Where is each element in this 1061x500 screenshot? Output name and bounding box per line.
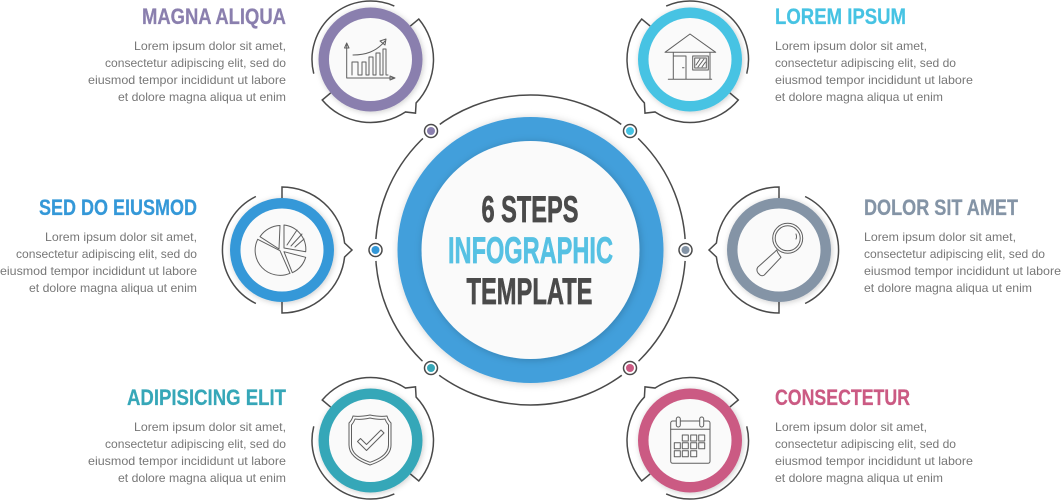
step circle: lorem ipsum [597,0,776,154]
inner disc [422,141,640,359]
text: dolor sit amet: et dolore magna aliqua ut enim [864,281,1032,295]
icon: magnifier [757,223,803,276]
text: adipisicing elit: eiusmod tempor incididunt ut labore [88,454,286,468]
node: purple [420,120,442,142]
center title: 6 STEPS [482,189,578,230]
step circle: dolor sit amet [709,187,839,313]
text: adipisicing elit: consectetur adipiscing elit, sed do [105,437,286,451]
text: consectetur: et dolore magna aliqua ut enim [775,471,943,485]
icon: house [665,34,716,79]
ring [727,198,831,302]
text: adipisicing elit: et dolore magna aliqua ut enim [118,471,286,485]
text: lorem ipsum: eiusmod tempor incididunt ut labore [775,73,973,87]
outline arcs [597,0,776,154]
text: sed do eiusmod: et dolore magna aliqua ut enim [29,281,197,295]
blue ring [398,117,664,383]
text: dolor sit amet: Lorem ipsum dolor sit amet, [864,230,1016,244]
outline arcs [222,187,352,313]
text: sed do eiusmod: SED DO EIUSMOD [39,195,197,220]
text: consectetur: Lorem ipsum dolor sit amet, [775,420,927,434]
text: consectetur: CONSECTETUR [775,385,910,410]
outer ring [376,95,686,405]
text: lorem ipsum [775,4,973,104]
text: consectetur [775,385,973,485]
center title: INFOGRAPHIC [448,230,613,271]
icon: pie chart [255,225,306,275]
center title [448,189,613,312]
icon: bar chart [344,39,395,80]
text: sed do eiusmod [0,195,197,295]
step circle: adipisicing elit [285,346,464,500]
ring [638,8,742,112]
text: magna aliqua: consectetur adipiscing elit, sed do [105,56,286,70]
text: consectetur: consectetur adipiscing elit, sed do [775,437,956,451]
text: lorem ipsum: Lorem ipsum dolor sit amet, [775,39,927,53]
text: sed do eiusmod: Lorem ipsum dolor sit amet, [45,230,197,244]
text: consectetur: eiusmod tempor incididunt ut labore [775,454,973,468]
text: magna aliqua: eiusmod tempor incididunt ut labore [88,73,286,87]
step circle: consectetur [597,346,776,500]
text: adipisicing elit: Lorem ipsum dolor sit amet, [134,420,286,434]
outline arcs [709,187,839,313]
text: dolor sit amet [864,195,1061,295]
node: light blue [619,120,641,142]
step circle: sed do eiusmod [222,187,352,313]
ring [638,388,742,492]
text: dolor sit amet: consectetur adipiscing elit, sed do [864,247,1045,261]
text: adipisicing elit [88,385,286,485]
text: sed do eiusmod: eiusmod tempor incididunt ut labore [0,264,197,278]
text: lorem ipsum: LOREM IPSUM [775,4,906,29]
node: blue [364,239,386,261]
outline arcs [285,346,464,500]
ring [230,198,334,302]
icon: shield [349,415,391,465]
outline arcs [285,0,464,154]
text: dolor sit amet: DOLOR SIT AMET [864,195,1018,220]
center title: TEMPLATE [466,271,592,312]
node: pink [619,357,641,379]
step circle: magna aliqua [285,0,464,154]
text: magna aliqua: et dolore magna aliqua ut enim [118,90,286,104]
text: lorem ipsum: consectetur adipiscing elit, sed do [775,56,956,70]
text: lorem ipsum: et dolore magna aliqua ut enim [775,90,943,104]
node: teal [420,357,442,379]
text: dolor sit amet: eiusmod tempor incididunt ut labore [864,264,1061,278]
text: magna aliqua [88,4,286,104]
text: magna aliqua: Lorem ipsum dolor sit amet, [134,39,286,53]
icon: calendar [671,417,710,463]
outline arcs [597,346,776,500]
text: sed do eiusmod: consectetur adipiscing elit, sed do [16,247,197,261]
node: grey [674,239,696,261]
text: magna aliqua: MAGNA ALIQUA [142,4,286,29]
text: adipisicing elit: ADIPISICING ELIT [127,385,286,410]
central circle [376,95,686,405]
ring [318,388,422,492]
ring [318,8,422,112]
